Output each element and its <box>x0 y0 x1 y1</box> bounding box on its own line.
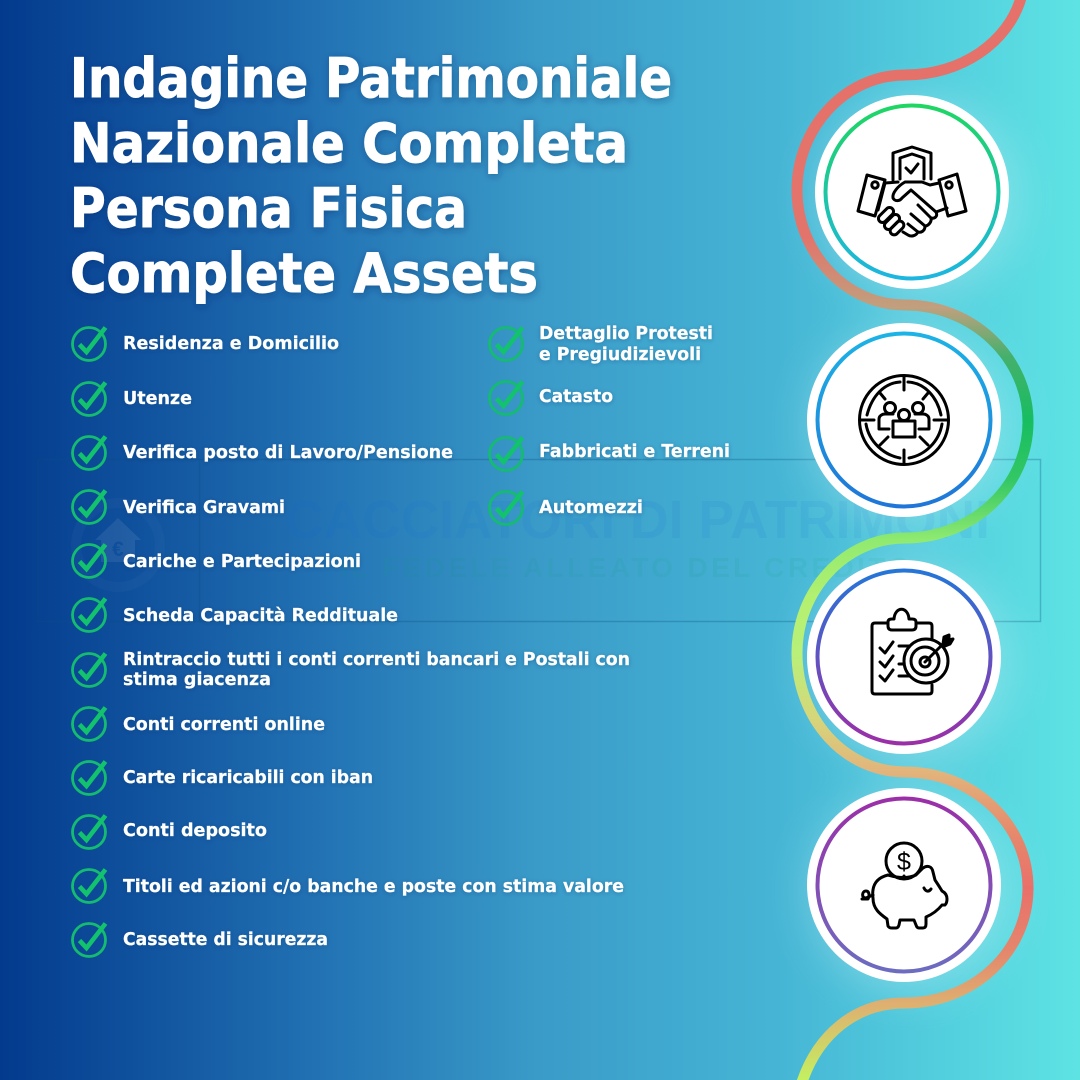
item: Cassette di sicurezza <box>72 924 328 956</box>
item: Dettaglio Protesti: Dettaglio Protesti <box>539 324 713 344</box>
wavy ribbon <box>797 0 1028 1080</box>
item: Rintraccio conti correnti <box>72 650 630 690</box>
checklist right column <box>490 324 730 524</box>
item: Verifica posto di Lavoro/Pensione <box>72 436 453 470</box>
watermark logo: € <box>112 538 124 561</box>
item: Residenza e Domicilio: Residenza e Domicilio <box>123 334 339 354</box>
item: Cassette di sicurezza: Cassette di sicurezza <box>123 930 328 950</box>
item: Dettaglio Protesti: e Pregiudizievoli <box>539 345 701 365</box>
item: Conti deposito <box>72 816 267 848</box>
item: Titoli ed azioni <box>72 870 624 902</box>
title: Complete Assets <box>70 242 538 305</box>
item: Carte ricaricabili con iban <box>72 762 373 794</box>
item: Utenze <box>72 382 192 416</box>
item: Dettaglio Protesti <box>490 324 713 365</box>
icon: checklist clipboard with target <box>872 609 953 694</box>
icon: piggy bank with dollar coin <box>862 843 947 928</box>
title: Persona Fisica <box>70 177 467 240</box>
badge: piggy bank <box>807 788 1001 982</box>
icon: dollar symbol: $ <box>897 848 911 876</box>
checklist left column <box>72 328 630 956</box>
icon: people in crosshair <box>860 376 948 464</box>
title: Indagine Patrimoniale <box>70 47 672 110</box>
title <box>70 47 672 305</box>
title: Nazionale Completa <box>70 112 628 175</box>
item: Automezzi: Automezzi <box>539 498 643 518</box>
item: Verifica Gravami <box>72 490 285 524</box>
item: Verifica posto di Lavoro/Pensione: Verifica posto di Lavoro/Pensione <box>123 443 453 463</box>
item: Conti correnti online: Conti correnti online <box>123 715 325 735</box>
item: Utenze: Utenze <box>123 389 192 409</box>
item: Titoli ed azioni: Titoli ed azioni c/o banche e poste con stima valore <box>123 877 624 897</box>
item: Conti deposito: Conti deposito <box>123 821 267 841</box>
icon: handshake with shield <box>858 147 966 236</box>
item: Catasto: Catasto <box>539 387 613 407</box>
item: Catasto <box>490 382 613 414</box>
item: Fabbricati e Terreni: Fabbricati e Terreni <box>539 442 730 462</box>
item: Automezzi <box>490 492 643 524</box>
item: Carte ricaricabili con iban: Carte ricaricabili con iban <box>123 768 373 788</box>
watermark logo: IL FEDELE ALLEATO DEL CREDITO <box>340 552 910 583</box>
item: Rintraccio conti correnti: Rintraccio tutti i conti correnti bancari e Postali con <box>123 650 630 670</box>
item: Scheda Capacità Reddituale <box>72 598 398 632</box>
item: Verifica Gravami: Verifica Gravami <box>123 498 285 518</box>
badge: handshake <box>815 95 1009 289</box>
watermark logo: CACCIATORI DI PATRIMONI <box>285 490 990 550</box>
badge: clipboard target <box>807 560 1001 754</box>
item: Scheda Capacità Reddituale: Scheda Capacità Reddituale <box>123 606 398 626</box>
item: Cariche e Partecipazioni <box>72 544 361 578</box>
watermark logo <box>76 490 990 587</box>
circle glows <box>810 98 1018 991</box>
item: Residenza e Domicilio <box>72 328 339 360</box>
item: Rintraccio conti correnti: stima giacenza <box>123 670 271 690</box>
badge: target people <box>807 323 1001 517</box>
item: Conti correnti online <box>72 708 325 740</box>
item: Fabbricati e Terreni <box>490 438 730 470</box>
item: Cariche e Partecipazioni: Cariche e Partecipazioni <box>123 552 361 572</box>
watermark frame <box>38 459 1040 622</box>
